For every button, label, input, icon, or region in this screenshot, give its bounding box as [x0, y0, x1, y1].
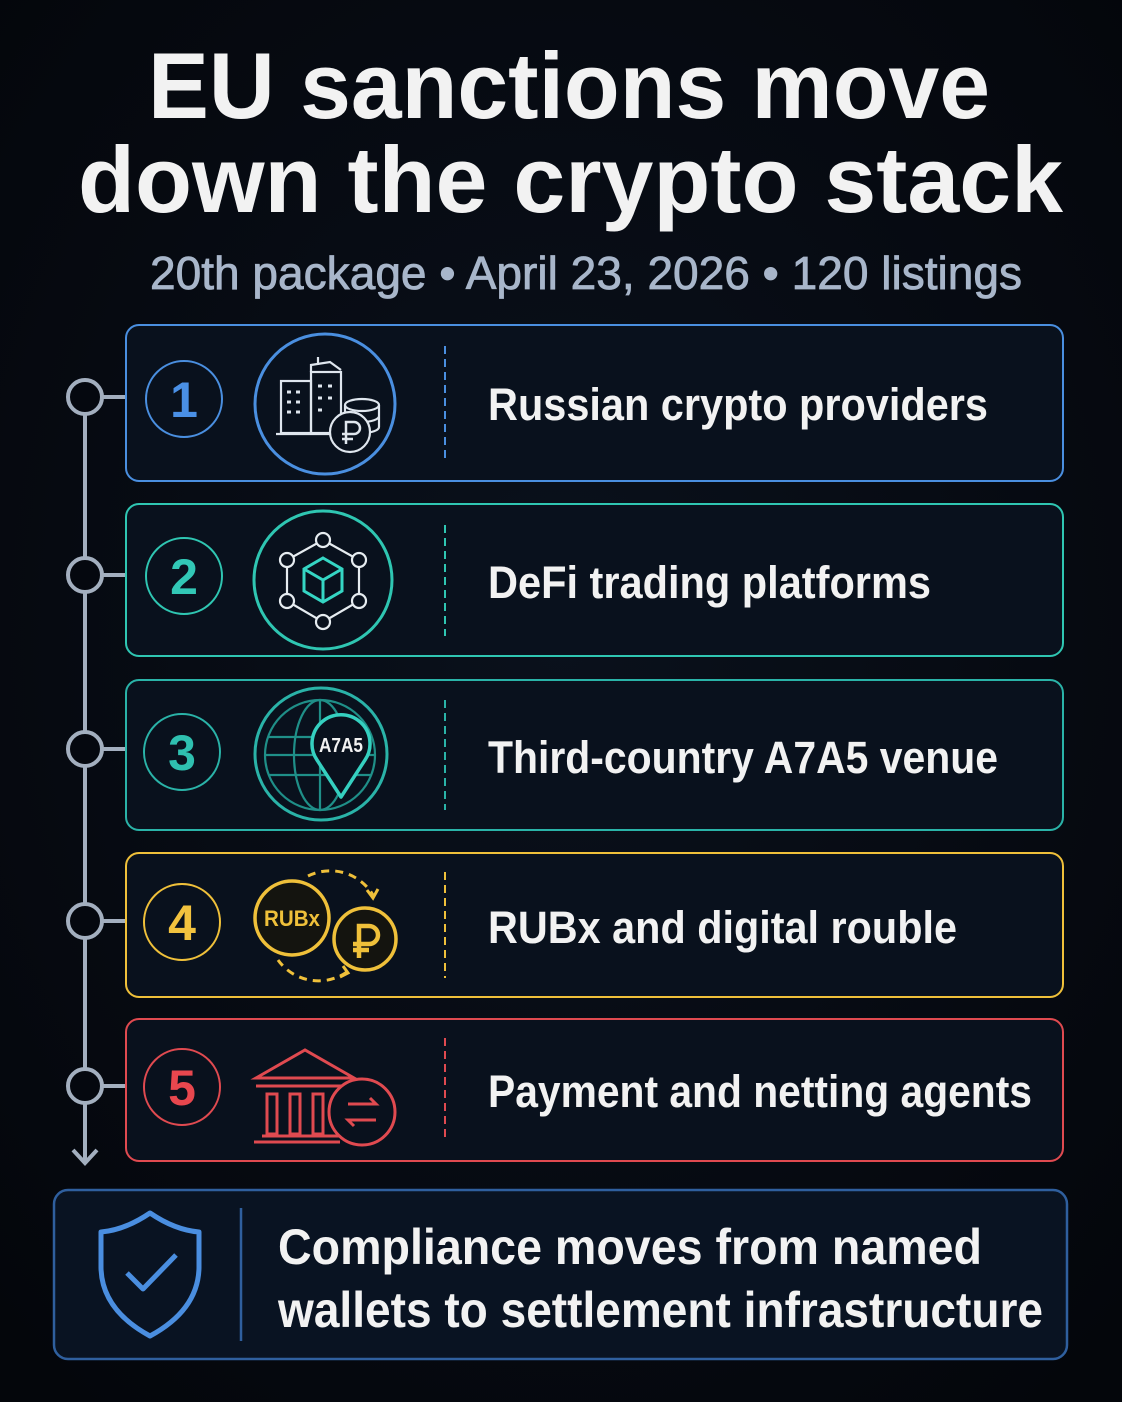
panel: 1 Russian crypto providers: Russian crypto providers	[488, 379, 988, 430]
icon: globe with A7A5 pin	[255, 688, 387, 820]
title: EU sanctions move	[148, 33, 990, 138]
panel: 3 Third-country A7A5 venue: 3	[168, 725, 196, 781]
panel: compliance conclusion: Compliance moves from named	[278, 1219, 982, 1275]
panel: 3 Third-country A7A5 venue: Third-country A7A5 venue	[488, 732, 998, 783]
panel: 1 Russian crypto providers: 1	[170, 372, 198, 428]
timeline	[68, 380, 125, 1163]
panel: 1 Russian crypto providers	[126, 325, 1063, 481]
icon: network cube	[254, 511, 392, 649]
panel: 4 RUBx and digital rouble: 4	[168, 895, 196, 951]
panel: 4 RUBx and digital rouble: RUBx and digital rouble	[488, 902, 957, 953]
icon: RUBx and rouble coins	[255, 871, 396, 981]
icon: building with rouble coins	[255, 334, 395, 474]
title: down the crypto stack	[78, 127, 1064, 232]
panel: 4 RUBx and digital rouble	[126, 853, 1063, 997]
panel: compliance conclusion	[54, 1190, 1067, 1359]
icon: RUBx and rouble coins: RUBx	[264, 906, 321, 931]
subtitle: 20th package • April 23, 2026 • 120 listings	[150, 247, 1022, 299]
title	[78, 33, 1064, 232]
icon: bank with exchange	[254, 1050, 395, 1145]
icon: globe with A7A5 pin: A7A5	[319, 735, 363, 757]
panel: 5 Payment and netting agents: 5	[168, 1060, 196, 1116]
panel: 2 DeFi trading platforms: DeFi trading platforms	[488, 557, 931, 608]
panel: 5 Payment and netting agents: Payment and netting agents	[488, 1066, 1032, 1117]
panel: 5 Payment and netting agents	[126, 1019, 1063, 1161]
panel: compliance conclusion: wallets to settlement infrastructure	[277, 1282, 1043, 1338]
panel: 3 Third-country A7A5 venue	[126, 680, 1063, 830]
panel: 2 DeFi trading platforms	[126, 504, 1063, 656]
icon: shield check	[101, 1213, 199, 1336]
panel: 2 DeFi trading platforms: 2	[170, 549, 198, 605]
